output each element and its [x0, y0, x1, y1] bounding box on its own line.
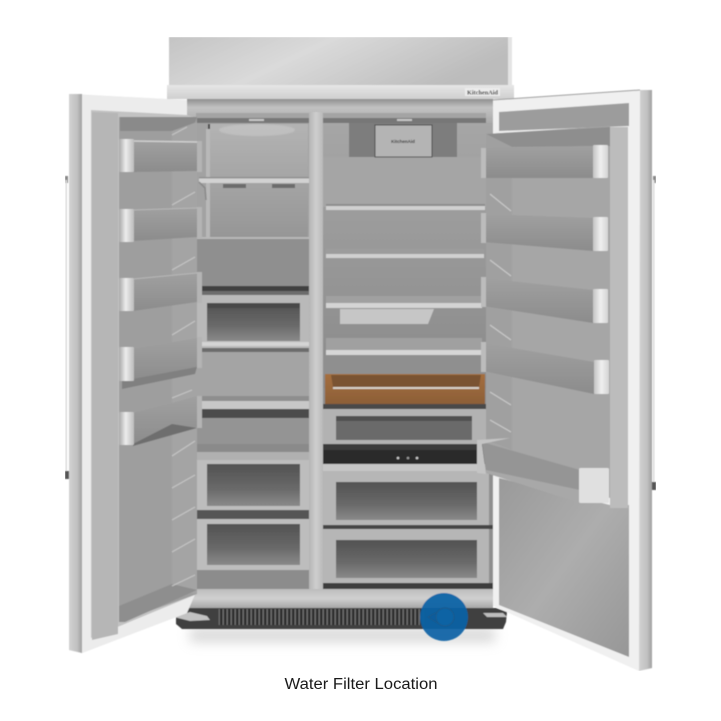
wire shelf lower [197, 444, 309, 460]
top trim band [167, 85, 514, 99]
floor shadow [190, 628, 495, 642]
wire shelf [197, 396, 309, 418]
drawer 2 [323, 471, 489, 525]
center mullion [309, 112, 323, 590]
freezer drawer 2 [197, 460, 309, 510]
wood drawer [325, 374, 485, 404]
toe kick with grille [174, 608, 507, 629]
door liner [610, 127, 628, 508]
crisper tray [340, 309, 434, 324]
door liner [91, 110, 197, 638]
mid back wall [197, 348, 309, 397]
cabinet body [187, 99, 493, 590]
caption: Water Filter Location [284, 676, 438, 693]
brand badge [465, 88, 500, 96]
door bracket ticks [490, 194, 511, 432]
door bin 4 [481, 342, 609, 394]
base front [187, 589, 493, 608]
door bin 2 [481, 213, 608, 251]
top filter module: KitchenAid [391, 139, 415, 144]
right compartment (refrigerator) [323, 123, 493, 589]
water filter location marker [420, 593, 468, 641]
door lower gray panel [499, 478, 629, 657]
drawer 1 [323, 409, 487, 444]
lower panel [197, 237, 309, 287]
freezer drawer 3 [197, 519, 309, 570]
shelf rail [206, 129, 210, 237]
door outer edge [493, 90, 652, 671]
door handle hardware [652, 176, 656, 490]
door bin 3 [481, 277, 608, 323]
left door [65, 94, 202, 653]
door top gray panel [499, 103, 629, 131]
refrigerator [65, 37, 656, 671]
back wall upper [197, 123, 309, 238]
glass shelf [199, 177, 309, 200]
door bin 5 [119, 396, 202, 446]
door bin 3 [119, 272, 202, 311]
door outer edge [69, 94, 187, 653]
door bracket ticks [172, 127, 195, 586]
door bin 1 [119, 139, 202, 172]
right door [477, 90, 656, 671]
door inner panel [119, 117, 197, 622]
control panel [323, 444, 489, 464]
top crown [169, 37, 512, 86]
door bin 4 [119, 337, 202, 389]
door bin 2 [119, 207, 202, 242]
top filter module [349, 123, 457, 157]
door handle hardware [65, 176, 69, 479]
left compartment (freezer) [197, 123, 309, 589]
brand badge: KitchenAid [467, 90, 499, 96]
drawer 3 [323, 529, 489, 583]
door bin 5 large [477, 438, 609, 503]
shelves [326, 204, 485, 210]
door bin 1 [481, 145, 608, 178]
top freezer drawer [197, 295, 309, 348]
